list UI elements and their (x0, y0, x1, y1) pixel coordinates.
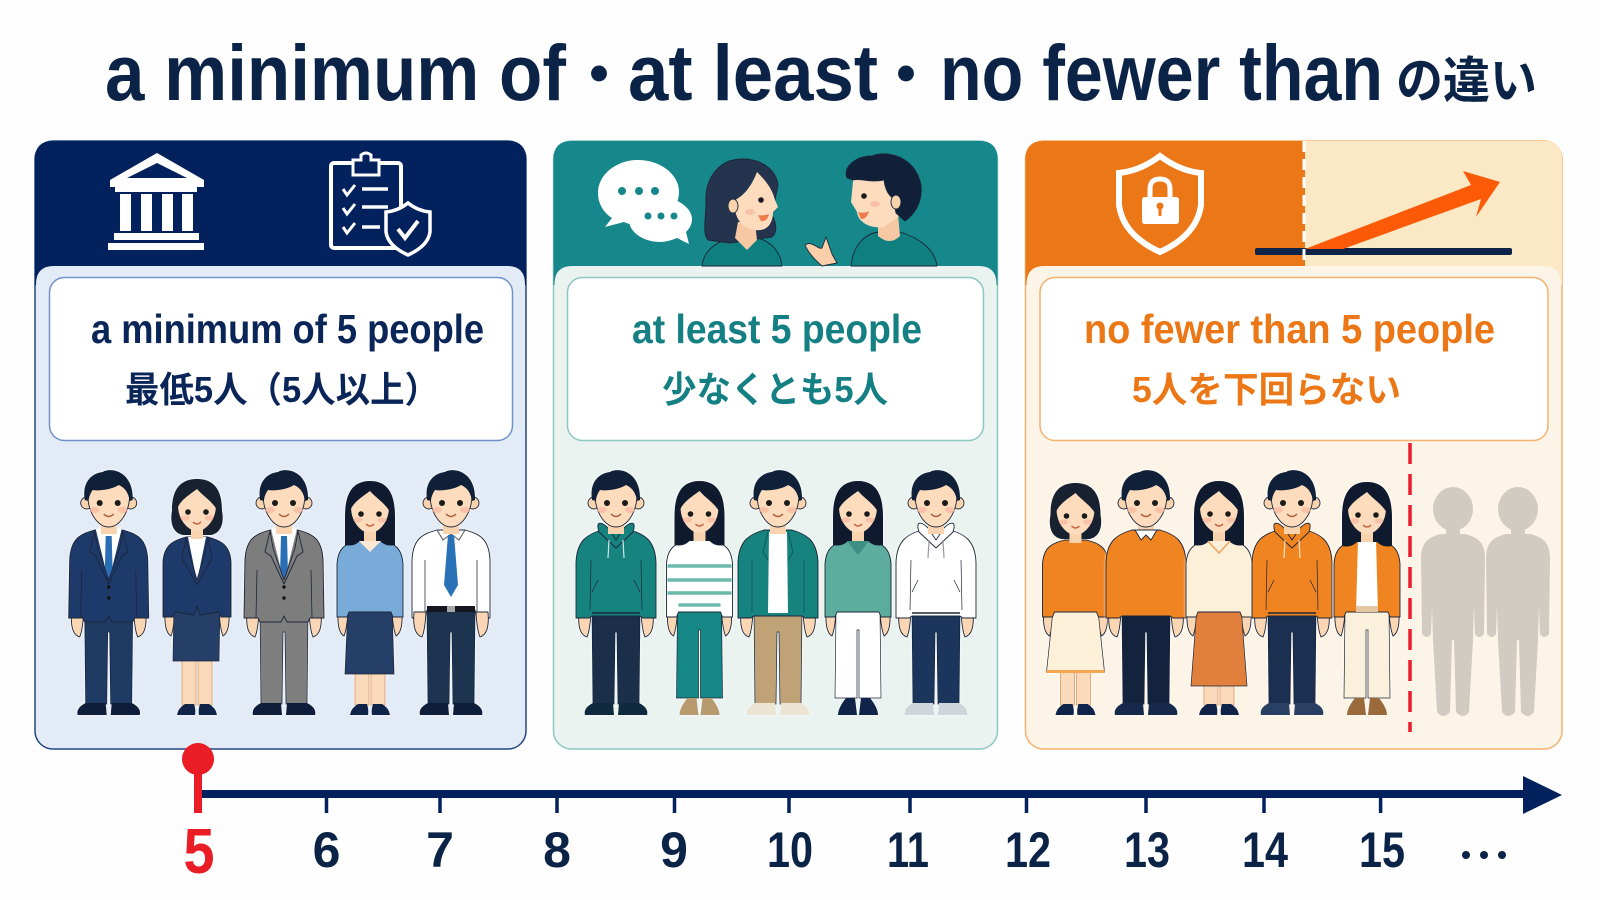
person: man in orange sweater (1106, 470, 1186, 715)
person: woman in green sweater and white trousers (825, 481, 891, 715)
illustration: man talking (805, 154, 937, 266)
number line: 15 (1359, 822, 1405, 878)
title: a minimum of (105, 28, 567, 117)
person: woman in striped top (666, 481, 732, 715)
icon: checklist with shield (331, 153, 430, 255)
number line: 9 (660, 822, 688, 878)
title: ・ (875, 42, 937, 111)
panel: no fewer than (1026, 141, 1562, 749)
title: at least (628, 28, 878, 117)
number line: 13 (1124, 822, 1170, 878)
callout: a minimum of 5 people: a minimum of 5 people (91, 306, 484, 352)
silhouette: seventh person (1486, 487, 1550, 716)
callout: no fewer than 5 people: no fewer than 5 people (1084, 306, 1495, 352)
person: woman in blue sweater (337, 481, 403, 715)
person: man in navy suit (69, 470, 149, 715)
person: man in white shirt and tie (412, 470, 490, 715)
number line: 7 (426, 822, 454, 878)
person: woman in orange sweater and cream skirt (1042, 483, 1108, 715)
person: man in white hoodie (896, 470, 976, 715)
callout: at least 5 people (568, 278, 984, 440)
number line: 12 (1005, 822, 1051, 878)
marker: five: 5 (184, 815, 214, 887)
limit line (1408, 443, 1412, 732)
icon: shield with padlock (1119, 156, 1201, 252)
silhouette: sixth person (1421, 487, 1485, 716)
callout: no fewer than 5 people (1040, 278, 1548, 440)
number line: 8 (543, 822, 571, 878)
person: man in teal hoodie (576, 470, 656, 715)
title: no fewer than (940, 28, 1383, 117)
diagram: threshold line with rising arrow (1255, 141, 1512, 260)
title: ・ (568, 42, 630, 111)
panel: at least (554, 141, 998, 749)
title (105, 28, 1537, 117)
person: man in grey suit (244, 470, 324, 715)
person: woman in navy skirt suit (163, 479, 231, 715)
number line: 14 (1242, 822, 1288, 878)
person: woman in orange cardigan (1334, 482, 1400, 715)
person: man in orange hoodie (1252, 470, 1332, 715)
number line (198, 776, 1562, 878)
person: man in teal jacket and beige trousers (738, 470, 818, 715)
callout: a minimum of 5 people: 最低5人（5人以上） (125, 369, 439, 410)
number line: 10 (767, 822, 813, 878)
person: woman in cream sweater and orange skirt (1186, 481, 1252, 715)
number line: 6 (313, 822, 340, 878)
number line: 11 (887, 822, 929, 878)
icon: speech bubbles (598, 160, 692, 244)
title: の違い (1396, 53, 1537, 109)
panel: a minimum of (35, 141, 526, 749)
callout: at least 5 people: 少なくとも5人 (662, 369, 888, 410)
illustration: woman talking (702, 159, 782, 266)
callout: no fewer than 5 people: 5人を下回らない (1132, 369, 1401, 410)
icon: government building (108, 153, 204, 250)
callout: at least 5 people: at least 5 people (632, 306, 922, 352)
marker: five (182, 743, 214, 887)
callout: a minimum of 5 people (50, 278, 512, 440)
